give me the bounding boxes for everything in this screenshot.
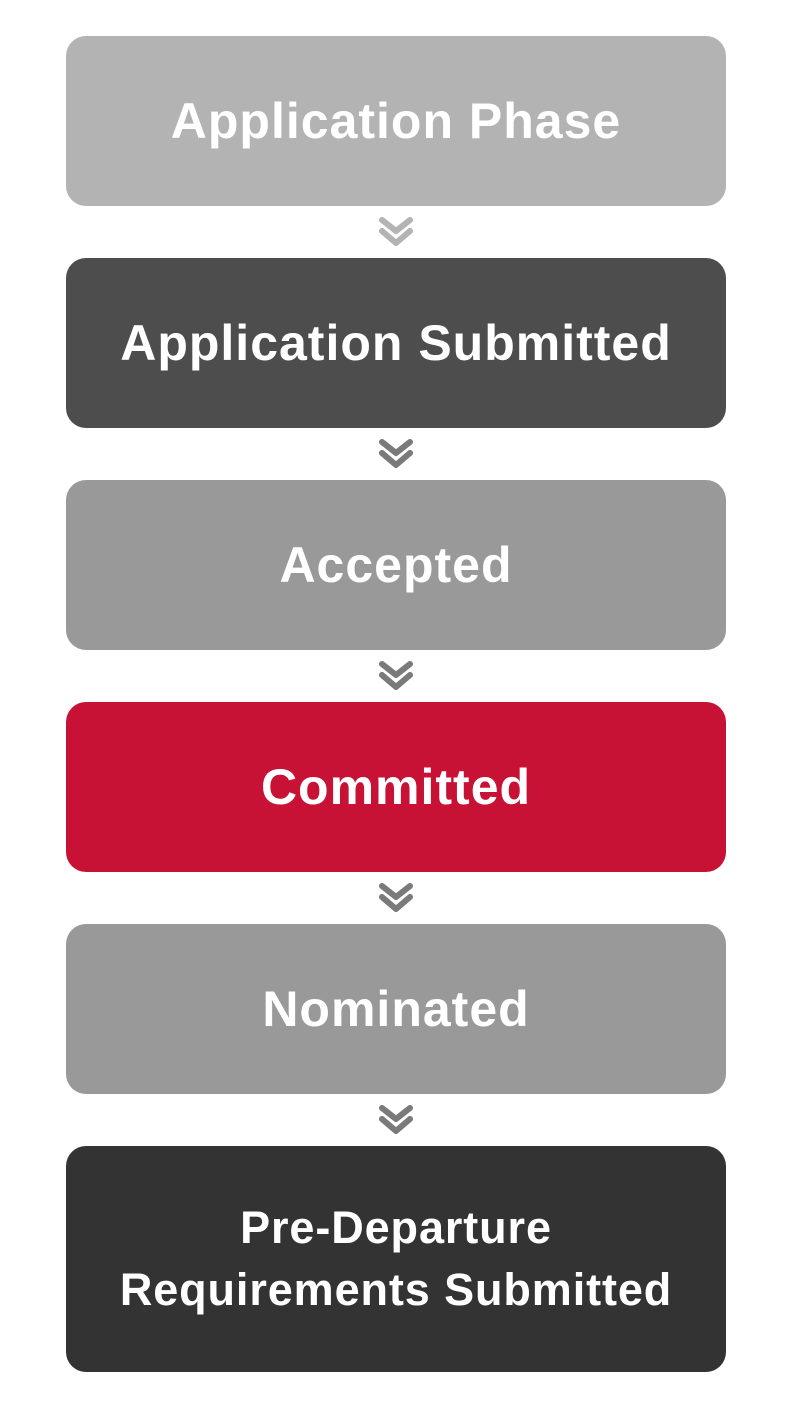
step: Application Phase [66, 36, 726, 206]
step: Pre-Departure Requirements Submitted: Requirements Submitted [120, 1264, 672, 1315]
step: Nominated [66, 924, 726, 1094]
arrow 2 [379, 439, 413, 468]
step: Committed [66, 702, 726, 872]
step: Committed: Committed [261, 759, 531, 815]
step: Accepted: Accepted [279, 537, 513, 593]
arrow 3 [379, 661, 413, 690]
step: Application Submitted: Application Submitted [120, 315, 672, 371]
step: Pre-Departure Requirements Submitted: Pre-Departure [240, 1202, 552, 1253]
step: Nominated: Nominated [262, 981, 530, 1037]
step: Application Phase: Application Phase [171, 93, 621, 149]
arrow 1 [379, 217, 413, 246]
step: Accepted [66, 480, 726, 650]
arrow 4 [379, 883, 413, 912]
step: Pre-Departure Requirements Submitted [66, 1146, 726, 1372]
arrow 5 [379, 1105, 413, 1134]
step: Application Submitted [66, 258, 726, 428]
